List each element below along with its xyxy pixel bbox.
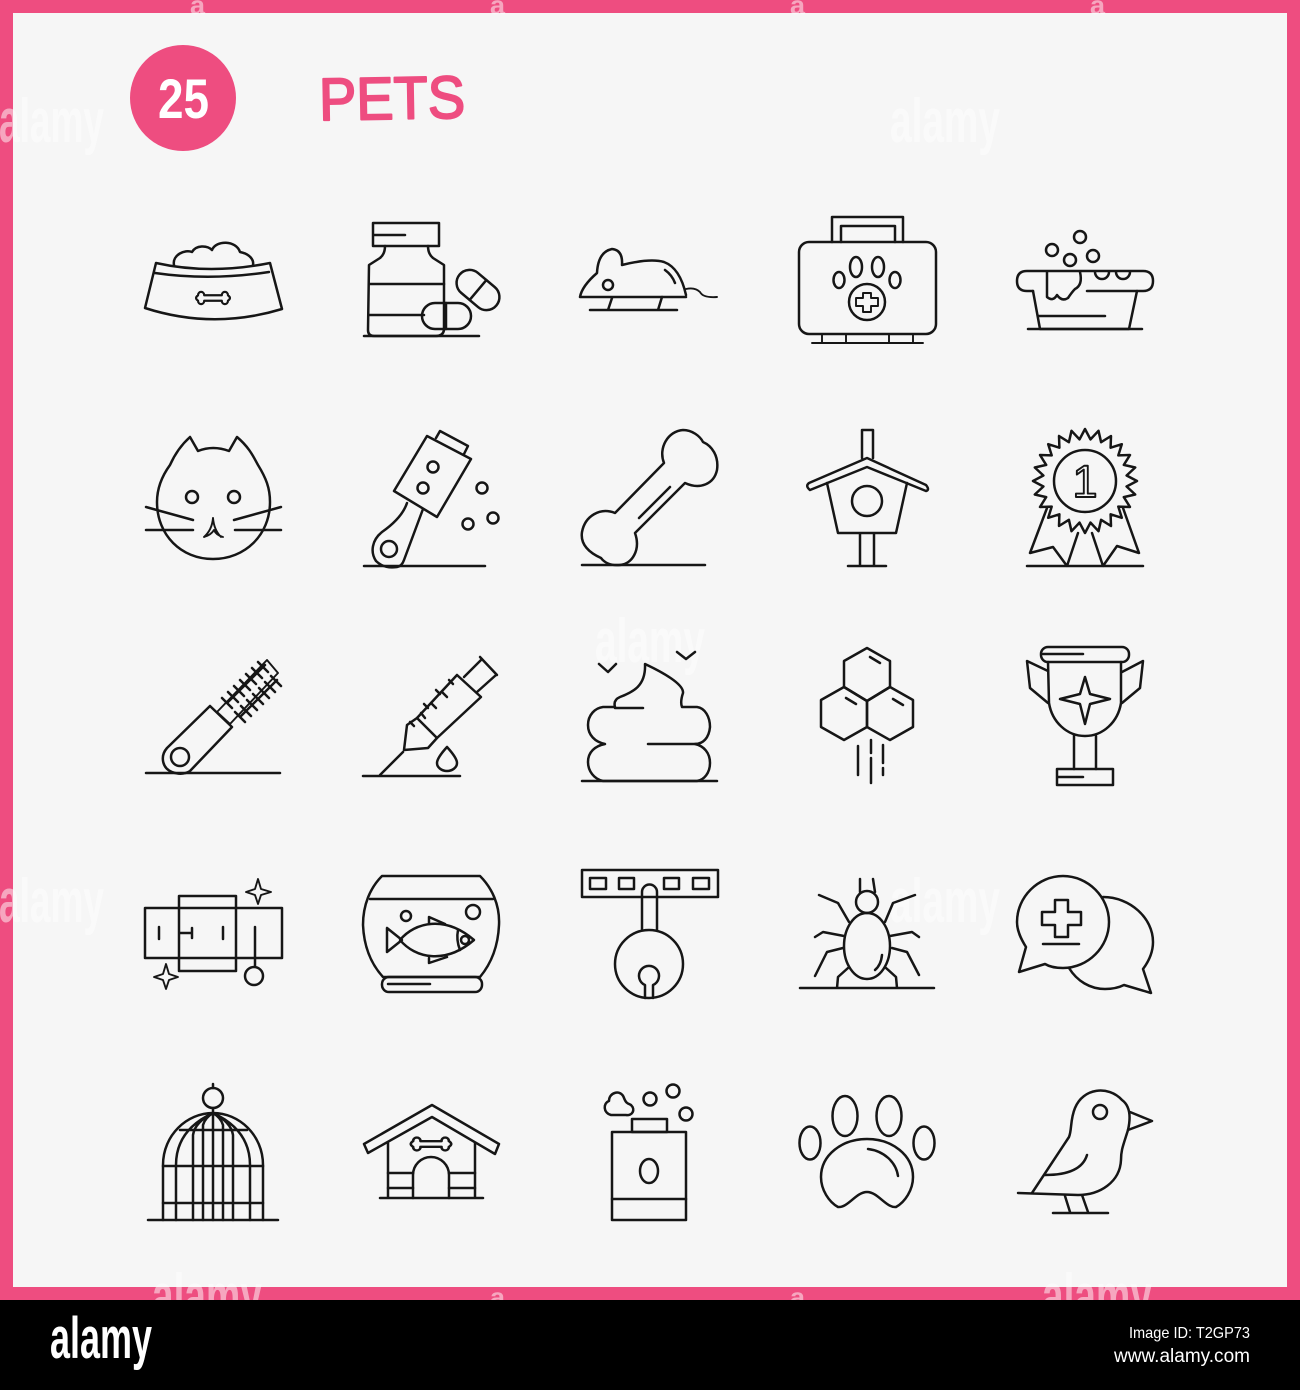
icon: first place rosette: 1 [1072,456,1098,507]
watermarks: alamy [152,1262,262,1331]
watermarks: alamy [0,867,104,936]
icon: poop [582,652,717,781]
icon: food bowl [145,243,282,319]
icon: collar with bell [582,870,718,998]
watermarks: alamy [0,87,104,156]
icon: shampoo bottle with bubbles [605,1084,692,1220]
icon: pet brush [146,660,281,774]
watermarks: alamy [595,607,705,676]
icon: honeycomb [821,648,913,783]
icon: mouse [580,249,717,310]
icon: syringe [363,657,497,776]
footer image id: Image ID: T2GP73 [1129,1325,1250,1342]
title: PETS: PETS [318,64,466,133]
icon: beetle bug [800,879,934,988]
icon: bone [582,430,717,565]
icon: paw print [800,1096,934,1207]
watermarks: alamy [890,87,1000,156]
footer logo: alamy: alamy [50,1306,152,1371]
icon: lint roller [364,431,498,567]
icon: pet first aid case [799,217,936,343]
footer website: www.alamy.com [1113,1346,1250,1367]
icon: medicine bottle and pills [364,223,505,336]
icon: dog house [364,1105,499,1198]
icon: trophy [1027,647,1143,785]
watermarks: alamy [890,867,1000,936]
badge: 25 [130,45,236,151]
watermarks: alamy [1042,1262,1152,1331]
icon: bath tub with bubbles [1017,231,1153,329]
icon: bird [1018,1091,1152,1213]
icon: bird cage [148,1084,278,1220]
watermarks: a [490,1282,506,1312]
watermarks: a [790,1282,806,1312]
icon: first place rosette [1027,429,1143,566]
badge: 25: 25 [158,67,209,130]
icon: cat face [146,437,281,559]
icon: pet collar with sparkles [145,879,282,989]
icon: bird house [807,430,928,566]
icon: medical chat bubbles [1017,876,1153,993]
icon: fish bowl [363,876,499,992]
black footer bar [0,1300,1300,1390]
